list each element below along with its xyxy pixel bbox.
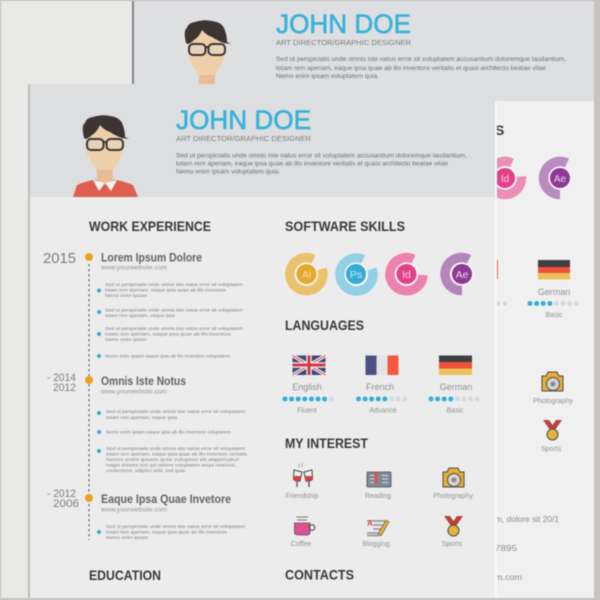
donut: After Effects <box>445 258 473 291</box>
job: Eaque Ipsa Quae Invetore <box>100 492 231 514</box>
back donut: Id <box>488 161 521 194</box>
donut: InDesign <box>390 258 423 291</box>
summary: totam rem aperiam, eaque ipsa quae ab illo inventore veritatis et quasi architecto beatae vitae <box>176 160 448 168</box>
back Photography label: Photography <box>533 398 573 405</box>
job: Lorem Ipsum Dolore: www.yourwebsite.com <box>100 264 167 272</box>
header band <box>30 84 495 197</box>
flag: Germany <box>439 356 472 375</box>
flag: UK <box>292 356 326 375</box>
job: Omnis Iste Notus: Omnis Iste Notus <box>101 374 186 388</box>
icon: coffee <box>294 517 315 535</box>
back icon: camera <box>542 372 563 391</box>
job 2 bullets: Sed ut perspiciatis unde omnis iste natus error sit voluptatem <box>106 409 245 414</box>
name: JOHN DOE <box>176 105 311 135</box>
back icon: medal <box>543 420 562 440</box>
job 3 bullets: Nemo enim ipsam <box>106 535 148 540</box>
donut: InDesign: Id <box>402 269 411 281</box>
back avatar <box>185 20 231 90</box>
job 2 bullets: totam rem aperiam, eaque ipsa <box>106 415 177 420</box>
back Sports label: Sports <box>541 446 562 453</box>
back language dots <box>496 301 579 306</box>
back donut: Ae <box>544 162 571 194</box>
job 1 bullets: totam rem aperiam, eaque ipsa quae ab illo inventore <box>105 332 232 336</box>
job: Omnis Iste Notus <box>100 374 186 396</box>
job 2 bullets: Nemo enim ipsam eaque ipsa ab illo inventore voluptatem <box>106 430 231 434</box>
rating: English <box>282 396 334 402</box>
level: Advance: Advance <box>369 408 397 414</box>
job 2 bullets: Nemo enim ipsam quia voluptas sit aspernatur <box>106 457 240 462</box>
date: 2012-2006: - 2012 <box>47 488 76 500</box>
back phone fragment: 7895 <box>495 544 518 553</box>
summary: Sed ut perspiciatis unde omnis iste natus error sit voluptatem accusantium doloremque laudantium, <box>176 152 467 160</box>
back German flag <box>538 260 570 280</box>
donut: Photoshop <box>340 258 373 291</box>
label: Coffee: Coffee <box>291 541 311 548</box>
back Basic label: Basic <box>545 312 563 319</box>
donut: Illustrator: Ai <box>302 269 311 281</box>
back job title: ART DIRECTOR/GRAPHIC DESIGNER <box>276 38 412 47</box>
date: 2012-2006: 2006 <box>53 498 79 510</box>
job 3 bullets <box>97 524 245 540</box>
flag: France <box>366 356 398 375</box>
donut: After Effects: Ae <box>456 269 469 281</box>
job 1 bullets: Sed ut perspiciatis unde omnis iste natus error sit voluptatem <box>105 282 243 287</box>
icon: friendship <box>294 463 312 487</box>
job 3 bullets: Sed ut perspiciatis unde omnis iste natus error sit voluptatem <box>106 524 245 529</box>
icon: reading <box>367 472 391 487</box>
panel: front resume sheet <box>28 84 497 598</box>
icon: blogging <box>367 519 389 536</box>
donut: Illustrator <box>290 258 323 291</box>
back French flag fragment <box>495 260 498 279</box>
heading: education: EDUCATION <box>89 567 161 583</box>
job title: ART DIRECTOR/GRAPHIC DESIGNER <box>176 134 312 143</box>
label: German: German <box>440 382 472 392</box>
heading: software skills: SOFTWARE SKILLS <box>285 218 405 234</box>
date: 2014-2012: 2012 <box>53 382 76 394</box>
label: English: English <box>292 382 322 392</box>
summary: Nemo enim ipsam voluptatem quia. <box>176 168 280 176</box>
date: 2014-2012: - 2014 <box>47 372 76 384</box>
summary <box>176 152 467 176</box>
label: Photography: Photography <box>433 493 473 500</box>
job 2 bullets: magni dolores eos qui ratione voluptatem sequi nesciunt, <box>106 462 236 468</box>
level: Fluent: Fluent <box>297 408 317 414</box>
date: 2012-2006 <box>47 488 79 510</box>
job 2 bullets <box>97 409 248 473</box>
job 1 bullets: totam rem aperiam, eaque ipsa <box>105 313 175 318</box>
heading: contacts: CONTACTS <box>285 566 354 582</box>
rating: German <box>428 396 480 402</box>
back summary: Nemo enim ipsam voluptatem quia. <box>276 73 379 80</box>
job 2 bullets: Sed ut perspiciatis unde omnis iste natus error sit voluptatem <box>106 446 245 451</box>
job 3 bullets: totam rem aperiam, eaque ipsa quae ab illo inventore <box>106 530 227 534</box>
back summary: Sed ut perspiciatis unde omnis iste natus error sit voluptatem accusantium doloremque laudantium, <box>276 56 566 63</box>
date: 2015: 2015 <box>43 250 76 267</box>
back summary: totam rem aperiam, eaque ipsa quae ab illo inventore veritatis et quasi architecto beatae vitae <box>276 65 546 72</box>
job 1 bullets: Nemo enim ipsam eaque ipsa ab illo inventore voluptatem. <box>105 354 231 358</box>
back name: JOHN DOE <box>276 9 411 39</box>
panel: back resume sheet <box>134 1 594 598</box>
job 1 bullets: Nemo enim ipsam <box>105 337 147 342</box>
timeline <box>85 253 93 540</box>
job 1 bullets: Sed ut perspiciatis unde omnis iste natus error sit voluptatem <box>105 308 243 312</box>
job: Lorem Ipsum Dolore: Lorem Ipsum Dolore <box>101 250 202 264</box>
job 1 bullets: totam rem aperiam, eaque ipsa quae ab illo inventore <box>105 288 226 292</box>
job: Omnis Iste Notus: www.yourwebsite.com <box>100 388 167 396</box>
back email fragment: m.com <box>495 573 522 582</box>
back heading fragment: S <box>495 122 504 138</box>
rating: French <box>356 396 407 402</box>
icon: blogging: A <box>367 519 373 528</box>
heading: languages: LANGUAGES <box>285 317 364 333</box>
heading: my interest: MY INTEREST <box>285 435 368 451</box>
job: Lorem Ipsum Dolore <box>100 250 202 272</box>
label: Friendship: Friendship <box>286 493 318 500</box>
job 2 bullets: consectetur, adipisci velit, sed quia. <box>106 468 186 473</box>
job: Eaque Ipsa Quae Invetore: www.yourwebsite.com <box>100 506 167 514</box>
job 1 bullets: Nemo enim ipsam <box>105 293 147 298</box>
back donut: Ae: Ae <box>554 174 567 185</box>
icon: photography <box>443 468 464 487</box>
donut: Photoshop: Ps <box>350 269 362 281</box>
job 1 bullets <box>97 282 243 358</box>
label: Sports: Sports <box>442 541 463 548</box>
back donut: Id: Id <box>501 174 509 185</box>
label: Reading: Reading <box>365 493 391 500</box>
heading: work experience: WORK EXPERIENCE <box>89 218 211 234</box>
job 2 bullets: totam rem aperiam, eaque ipsa quae ab illo inventore veritatis <box>106 452 248 456</box>
job: Eaque Ipsa Quae Invetore: Eaque Ipsa Quae Invetore <box>101 492 231 506</box>
label: French: French <box>366 382 394 392</box>
icon: sports medal <box>444 516 463 536</box>
job 1 bullets: Sed ut perspiciatis unde omnis iste natus error sit voluptatem <box>105 326 243 331</box>
date: 2014-2012 <box>47 372 76 394</box>
front avatar <box>73 115 138 197</box>
back German label: German <box>538 287 570 297</box>
back address fragment: m, dolore sit 20/1 <box>495 515 560 524</box>
label: Blogging: Blogging <box>362 541 390 548</box>
back summary <box>276 56 566 80</box>
level: Basic: Basic <box>446 408 464 414</box>
